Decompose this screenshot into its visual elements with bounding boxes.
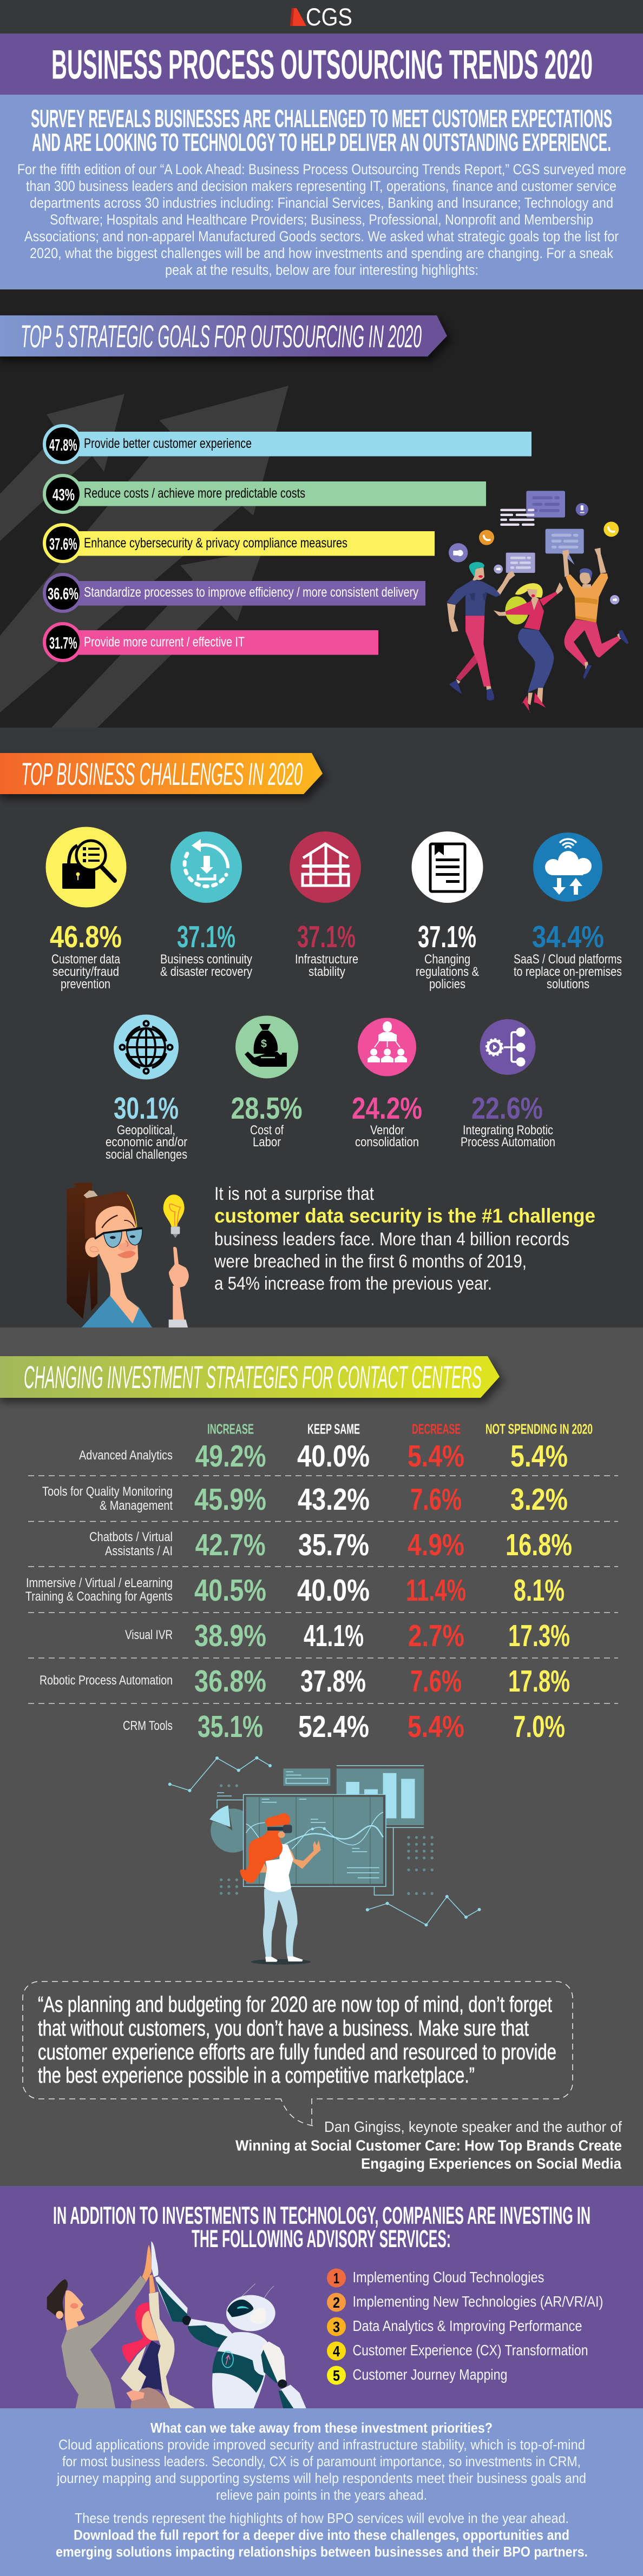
callout text: data security: customer data security is the #1 challenge [214, 1205, 595, 1227]
list item 1 [327, 2269, 544, 2287]
table column headers: INCREASE [207, 1421, 254, 1437]
goal bar: 37.6%: Enhance cybersecurity & privacy compliance measures [84, 536, 347, 551]
challenge: integrating robotic process automation: Process Automation [461, 1135, 555, 1150]
quote callout [23, 1981, 573, 2126]
icon: gear with branches [480, 1019, 536, 1075]
table row: Immersive training: Immersive / Virtual / eLearning [26, 1576, 173, 1590]
conclusion text: These trends represent the highlights of how BPO services will evolve in the year ahead. [75, 2510, 569, 2526]
table row: CRM Tools: CRM Tools [123, 1719, 173, 1733]
table row: CRM Tools: 52.4% [298, 1709, 369, 1744]
icon: lock with magnifier [45, 827, 127, 908]
challenge: business continuity: & disaster recovery [160, 965, 252, 979]
challenge: customer data security: 46.8% [50, 920, 122, 954]
goal bar: 31.7% [44, 624, 378, 660]
table row: Chatbots: Chatbots / Virtual [89, 1530, 173, 1544]
challenge: changing regulations [411, 831, 483, 992]
panel: advisory services [0, 2186, 643, 2409]
challenge: vendor consolidation: 24.2% [352, 1091, 422, 1126]
quote attribution: Dan Gingiss, keynote speaker and the author of [324, 2118, 622, 2135]
intro body text: peak at the results, below are four interesting highlights: [165, 262, 478, 278]
conclusion text [56, 2420, 588, 2560]
table row: Advanced Analytics: 5.4% [510, 1439, 568, 1474]
list item 4 [327, 2341, 588, 2361]
illustration: woman with lightbulb [67, 1183, 189, 1328]
challenge: customer data security: Customer data [51, 952, 121, 967]
section banner: challenges: TOP BUSINESS CHALLENGES IN 2020 [21, 757, 303, 792]
table row: Advanced Analytics: 40.0% [297, 1439, 370, 1474]
challenge: customer data security: prevention [61, 977, 110, 992]
illustration: three celebrating people with chat bubbles [447, 491, 629, 713]
challenge: cost of labor: Labor [253, 1135, 281, 1150]
advisory heading [53, 2202, 590, 2253]
table row: Advanced Analytics: Advanced Analytics [79, 1448, 173, 1463]
quote attribution: Winning at Social Customer Care: How Top Brands Create [235, 2137, 622, 2154]
challenge: geopolitical: Geopolitical, [117, 1123, 175, 1138]
table row: Chatbots: 35.7% [298, 1528, 369, 1562]
illustration: man, woman and robot high-five [47, 2241, 306, 2409]
table row: Immersive training: 8.1% [514, 1573, 565, 1608]
callout text: data security: were breached in the first 6 months of 2019, [214, 1251, 527, 1272]
challenge: geopolitical: social challenges [106, 1147, 187, 1162]
challenge: customer data security: security/fraud [53, 965, 119, 979]
conclusion text: Cloud applications provide improved security and infrastructure stability, which is top-of-mind [58, 2436, 585, 2453]
logo: CGS [290, 3, 352, 31]
challenge: geopolitical: economic and/or [106, 1135, 187, 1150]
icon: money bag on hand: $ [261, 1038, 267, 1050]
table row: Tools for Quality Monitoring: Tools for Quality Monitoring [42, 1484, 173, 1499]
challenge: infrastructure stability: stability [309, 965, 345, 979]
table row: CRM Tools: 7.0% [513, 1709, 565, 1744]
table row: Immersive training: Training & Coaching for Agents [25, 1589, 173, 1604]
illustration: woman in VR headset at data dashboard [168, 1756, 481, 1965]
challenge: geopolitical [106, 1015, 187, 1162]
list item 3: 3 [333, 2319, 340, 2335]
icon: circular arrow with download [170, 831, 242, 903]
challenge: customer data security [45, 827, 127, 992]
panel: top business challenges [0, 728, 643, 1328]
goal bar: 36.6% [44, 574, 425, 611]
table row: Robotic Process Automation [40, 1664, 570, 1699]
table column headers [207, 1421, 593, 1437]
table row: Chatbots [89, 1528, 572, 1562]
banner shadow [0, 320, 451, 361]
table row: Visual IVR [125, 1619, 570, 1653]
list item 3 [327, 2317, 582, 2336]
table row: Visual IVR: 38.9% [194, 1619, 266, 1653]
quote attribution: Engaging Experiences on Social Media [361, 2155, 621, 2172]
table row: Chatbots: 16.8% [506, 1528, 572, 1562]
conclusion text: emerging solutions impacting relationships between businesses and their BPO partners. [56, 2544, 588, 2560]
callout text: data security: business leaders face. More than 4 billion records [214, 1229, 569, 1250]
quote callout: the best experience possible in a competitive marketplace.” [38, 2063, 475, 2088]
table row: CRM Tools: 5.4% [408, 1709, 464, 1744]
table row: Tools for Quality Monitoring: 7.6% [410, 1482, 462, 1517]
list item 1: 1 [333, 2270, 339, 2287]
icon: document [411, 831, 483, 903]
table row: CRM Tools [123, 1709, 565, 1744]
challenge: geopolitical: 30.1% [114, 1091, 179, 1126]
callout text: data security: It is not a surprise that [214, 1184, 374, 1204]
challenge: SaaS cloud platforms: 34.4% [532, 920, 604, 954]
challenge: SaaS cloud platforms: solutions [547, 977, 589, 992]
banner shadow [0, 1361, 504, 1403]
section banner: investment [0, 1356, 500, 1398]
table row: Robotic Process Automation: 17.8% [508, 1664, 570, 1699]
panel: title band [0, 34, 643, 95]
challenge: vendor consolidation [352, 1018, 422, 1150]
list item 2: 2 [333, 2294, 340, 2311]
challenge: vendor consolidation: Vendor [370, 1123, 404, 1138]
conclusion text: journey mapping and supporting systems will help respondents meet their business goals and [56, 2470, 586, 2486]
panel: introduction [0, 95, 643, 289]
table row: Chatbots: 42.7% [195, 1528, 266, 1562]
list item 2: Implementing New Technologies (AR/VR/AI) [353, 2293, 603, 2310]
table column headers: KEEP SAME [307, 1421, 360, 1437]
table row: Immersive training: 11.4% [406, 1573, 466, 1608]
quote attribution [235, 2118, 622, 2172]
table row: Chatbots: Assistants / AI [105, 1544, 173, 1558]
table row: Robotic Process Automation: Robotic Process Automation [40, 1673, 173, 1688]
callout text: data security [214, 1184, 595, 1294]
conclusion text: What can we take away from these investment priorities? [150, 2420, 493, 2436]
challenge: vendor consolidation: consolidation [355, 1135, 419, 1150]
list: advisory services [327, 2269, 603, 2385]
challenge: SaaS cloud platforms [514, 833, 622, 992]
table row: Visual IVR: 41.1% [304, 1619, 364, 1653]
challenge: changing regulations: Changing [424, 952, 470, 967]
table row: Robotic Process Automation: 7.6% [410, 1664, 462, 1699]
challenge: infrastructure stability: Infrastructure [295, 952, 358, 967]
challenge: changing regulations: policies [429, 977, 465, 992]
challenge: business continuity [160, 831, 252, 979]
list item 1: Implementing Cloud Technologies [353, 2269, 544, 2286]
table row: Advanced Analytics: 49.2% [195, 1439, 266, 1474]
list item 4: Customer Experience (CX) Transformation [353, 2342, 588, 2359]
goal bar: 37.6% [44, 525, 435, 562]
goal bar: 47.8% [44, 426, 532, 463]
conclusion text: for most business leaders. Secondly, CX is of paramount importance, so investments in CRM, [62, 2453, 581, 2469]
challenge: infrastructure stability [290, 831, 361, 979]
table row: Advanced Analytics: 5.4% [408, 1439, 464, 1474]
table row: Robotic Process Automation: 36.8% [194, 1664, 266, 1699]
challenge: integrating robotic process automation: 22.6% [471, 1091, 543, 1126]
table row: Advanced Analytics [79, 1439, 568, 1474]
table row: Chatbots: 4.9% [408, 1528, 464, 1562]
goal bar: 43% [44, 475, 486, 512]
icon: people hierarchy [358, 1018, 416, 1076]
challenge: SaaS cloud platforms: to replace on-premises [514, 965, 622, 979]
logo: CGS: CGS [306, 3, 352, 31]
section banner: goals [0, 315, 447, 356]
list item 3: Data Analytics & Improving Performance [353, 2317, 582, 2334]
table row: Visual IVR: 2.7% [408, 1619, 464, 1653]
challenge: business continuity: 37.1% [177, 920, 235, 954]
table row: Tools for Quality Monitoring: 3.2% [510, 1482, 568, 1517]
challenge: cost of labor: 28.5% [231, 1091, 302, 1126]
goal bar: 47.8%: 47.8% [49, 435, 77, 454]
table row: Tools for Quality Monitoring [42, 1482, 568, 1517]
challenge: cost of labor [231, 1016, 302, 1150]
table row: Tools for Quality Monitoring: 45.9% [194, 1482, 266, 1517]
challenge: integrating robotic process automation: Integrating Robotic [463, 1123, 553, 1138]
table row: Visual IVR: Visual IVR [125, 1628, 173, 1642]
list item 5 [327, 2366, 508, 2385]
panel: top 5 strategic goals [0, 289, 643, 728]
table row: Immersive training: 40.0% [297, 1573, 370, 1608]
challenge: infrastructure stability: 37.1% [297, 920, 356, 954]
table row: Robotic Process Automation: 37.8% [300, 1664, 366, 1699]
callout text: data security: a 54% increase from the previous year. [214, 1273, 492, 1294]
goal bar: 43%: 43% [53, 485, 75, 504]
intro body text [17, 161, 626, 278]
conclusion text: Download the full report for a deeper dive into these challenges, opportunities and [74, 2527, 569, 2543]
goal bar: 31.7%: 31.7% [49, 633, 77, 652]
icon: globe [114, 1015, 179, 1080]
challenge: changing regulations: 37.1% [418, 920, 476, 954]
panel: header logo bar [0, 0, 643, 34]
icon: cloud with wifi and arrows [533, 833, 602, 902]
table row: Immersive training [25, 1573, 565, 1608]
banner shadow [0, 758, 327, 799]
table row: Visual IVR: 17.3% [508, 1619, 570, 1653]
goal bar: 36.6%: Standardize processes to improve efficiency / more consistent delivery [84, 585, 418, 600]
table row: Tools for Quality Monitoring: & Management [100, 1498, 173, 1513]
goal bar: 36.6%: 36.6% [48, 584, 78, 603]
icon: house frame [290, 831, 361, 903]
goal bar: 47.8%: Provide better customer experience [84, 436, 252, 451]
conclusion text: relieve pain points in the years ahead. [216, 2487, 427, 2503]
table row: Tools for Quality Monitoring: 43.2% [298, 1482, 370, 1517]
list item 5: Customer Journey Mapping [353, 2366, 508, 2383]
challenge: cost of labor: Cost of [250, 1123, 284, 1138]
goal bar: 31.7%: Provide more current / effective IT [84, 635, 245, 650]
goal bar: 37.6%: 37.6% [49, 534, 77, 553]
challenge: changing regulations: regulations & [416, 965, 479, 979]
table column headers: NOT SPENDING IN 2020 [485, 1421, 593, 1437]
table column headers: DECREASE [412, 1421, 461, 1437]
background arrows [0, 386, 288, 728]
challenge: business continuity: Business continuity [160, 952, 252, 967]
section banner: challenges [0, 753, 323, 794]
panel: conclusion [0, 2408, 643, 2576]
icon: money bag on hand [235, 1016, 298, 1079]
table row: Immersive training: 40.5% [194, 1573, 266, 1608]
challenge: integrating robotic process automation [461, 1019, 555, 1150]
panel: changing investment strategies [0, 1327, 643, 2186]
intro heading [31, 104, 612, 156]
list item 5: 5 [333, 2367, 340, 2384]
table row: CRM Tools: 35.1% [198, 1709, 263, 1744]
goal bar: 43%: Reduce costs / achieve more predictable costs [84, 486, 305, 501]
list item 4: 4 [333, 2343, 340, 2360]
